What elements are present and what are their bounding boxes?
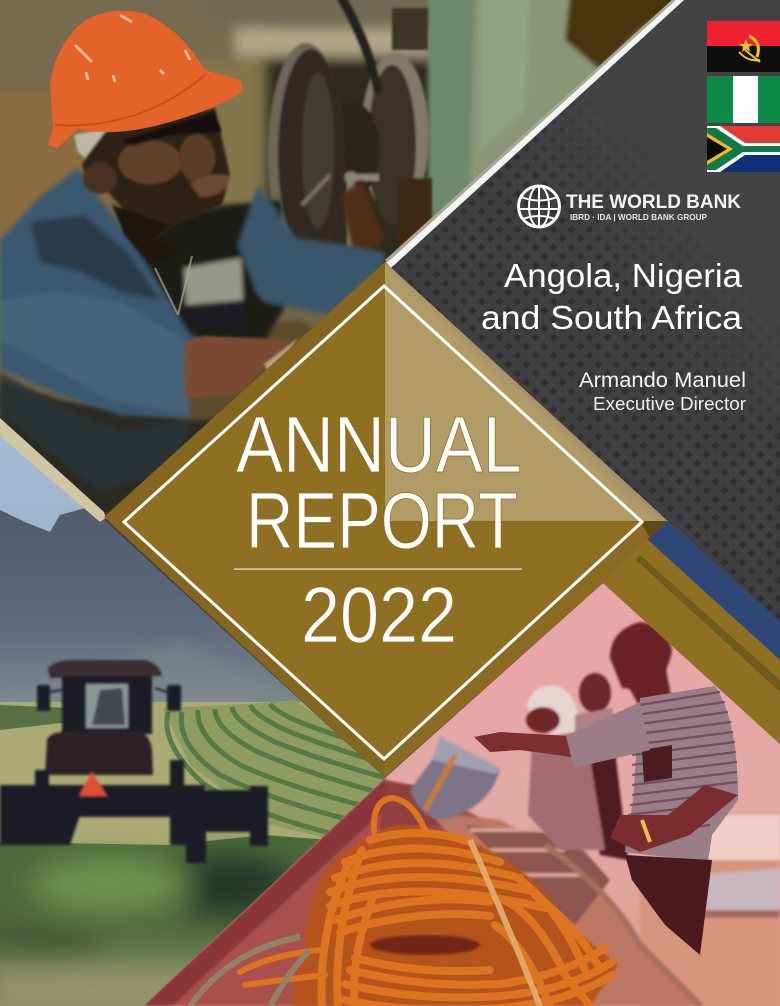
worker head [74, 108, 230, 262]
gold banner strip lower right [603, 521, 780, 744]
tractor [0, 660, 268, 863]
machine wheel [268, 0, 432, 267]
foreground grass [0, 834, 320, 1006]
logo: The World Bank [518, 186, 741, 227]
flag: South Africa [707, 126, 780, 172]
executive director name: Armando Manuel [579, 369, 746, 392]
beach and sea [640, 815, 780, 1006]
logo wordmark: THE WORLD BANK [566, 191, 741, 213]
bucket [410, 737, 500, 820]
flag: Nigeria [707, 76, 780, 123]
fisherman in striped shirt [474, 622, 738, 955]
fisherman in hood [526, 685, 628, 860]
photo: tractor in field [0, 436, 385, 1006]
field ground [0, 700, 385, 965]
photo: worker at machine [0, 0, 690, 525]
logo sub-line: IBRD · IDA | WORLD BANK GROUP [570, 212, 707, 222]
background dark panel [392, 128, 780, 620]
title: annual report [236, 400, 522, 565]
mown hay rows [164, 702, 385, 834]
gold central diamond [104, 262, 668, 778]
boat hull [143, 778, 705, 1006]
title: annual report: REPORT [246, 476, 518, 565]
stripe: white diagonal top [385, 0, 684, 268]
orange hard hat [48, 11, 243, 148]
region heading: Angola, Nigeria [504, 257, 743, 294]
photo: fishermen with rope on boat [140, 580, 780, 1006]
title: annual report: ANNUAL [236, 400, 522, 489]
worker body [0, 168, 385, 525]
divider line [234, 568, 522, 570]
white diamond outline [124, 286, 642, 759]
blue banner strip [648, 521, 780, 660]
icon: globe [518, 186, 560, 227]
year: 2022 [301, 570, 457, 659]
region heading: and South Africa [481, 299, 743, 336]
executive director title: Executive Director [593, 394, 746, 414]
green machine panel [425, 0, 672, 218]
region heading [481, 257, 743, 336]
flag: Angola [707, 21, 780, 72]
stripe: cream diagonal left [0, 418, 106, 522]
second fisherman [574, 671, 614, 732]
orange rope coil [190, 798, 618, 1006]
